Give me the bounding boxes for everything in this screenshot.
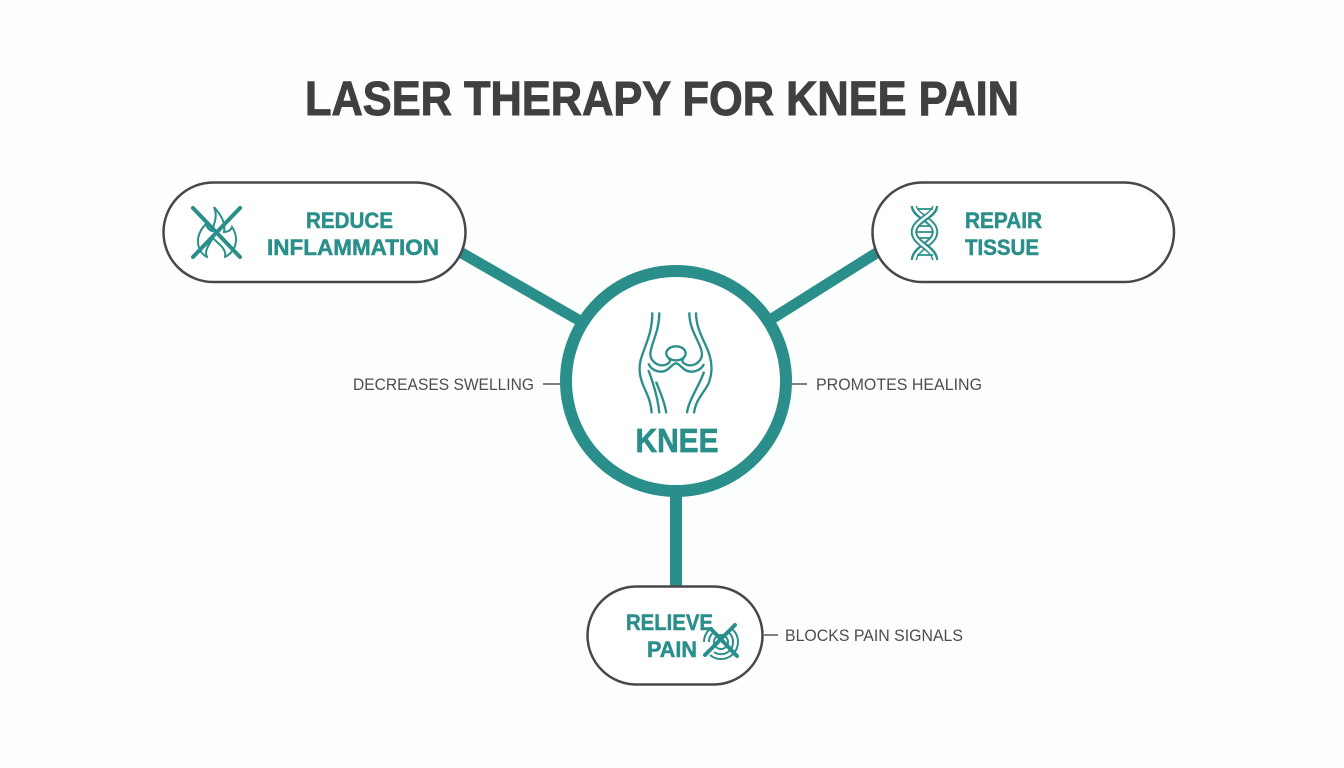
label: repair tissue: REPAIR <box>965 208 1042 233</box>
connector: repair tissue to knee <box>770 252 878 320</box>
title: LASER THERAPY FOR KNEE PAIN <box>305 73 1019 126</box>
callout: blocks pain signals: BLOCKS PAIN SIGNALS <box>785 627 963 645</box>
label: relieve pain: RELIEVE <box>626 610 713 635</box>
label: reduce inflammation: INFLAMMATION <box>267 235 439 260</box>
label: relieve pain: PAIN <box>647 637 697 662</box>
label: reduce inflammation: REDUCE <box>306 208 393 233</box>
panel: reduce inflammation <box>164 182 466 282</box>
icon: knee joint <box>640 312 712 413</box>
label: reduce inflammation <box>267 208 439 260</box>
icon: crossed-out flame <box>193 207 240 257</box>
label: repair tissue: TISSUE <box>965 235 1039 260</box>
connector: reduce inflammation to knee <box>460 252 582 322</box>
callout: decreases swelling: DECREASES SWELLING <box>353 376 534 394</box>
panel: knee hub <box>566 271 786 491</box>
panel: repair tissue <box>872 182 1174 282</box>
connector: knee to relieve pain <box>670 490 682 587</box>
icon: crossed-out pain signal <box>704 625 738 659</box>
label: repair tissue <box>965 208 1042 260</box>
icon: dna helix <box>914 204 935 262</box>
label: knee: KNEE <box>636 422 718 459</box>
label: relieve pain <box>626 610 713 662</box>
callout: promotes healing: PROMOTES HEALING <box>816 376 982 394</box>
panel: relieve pain <box>588 586 762 684</box>
